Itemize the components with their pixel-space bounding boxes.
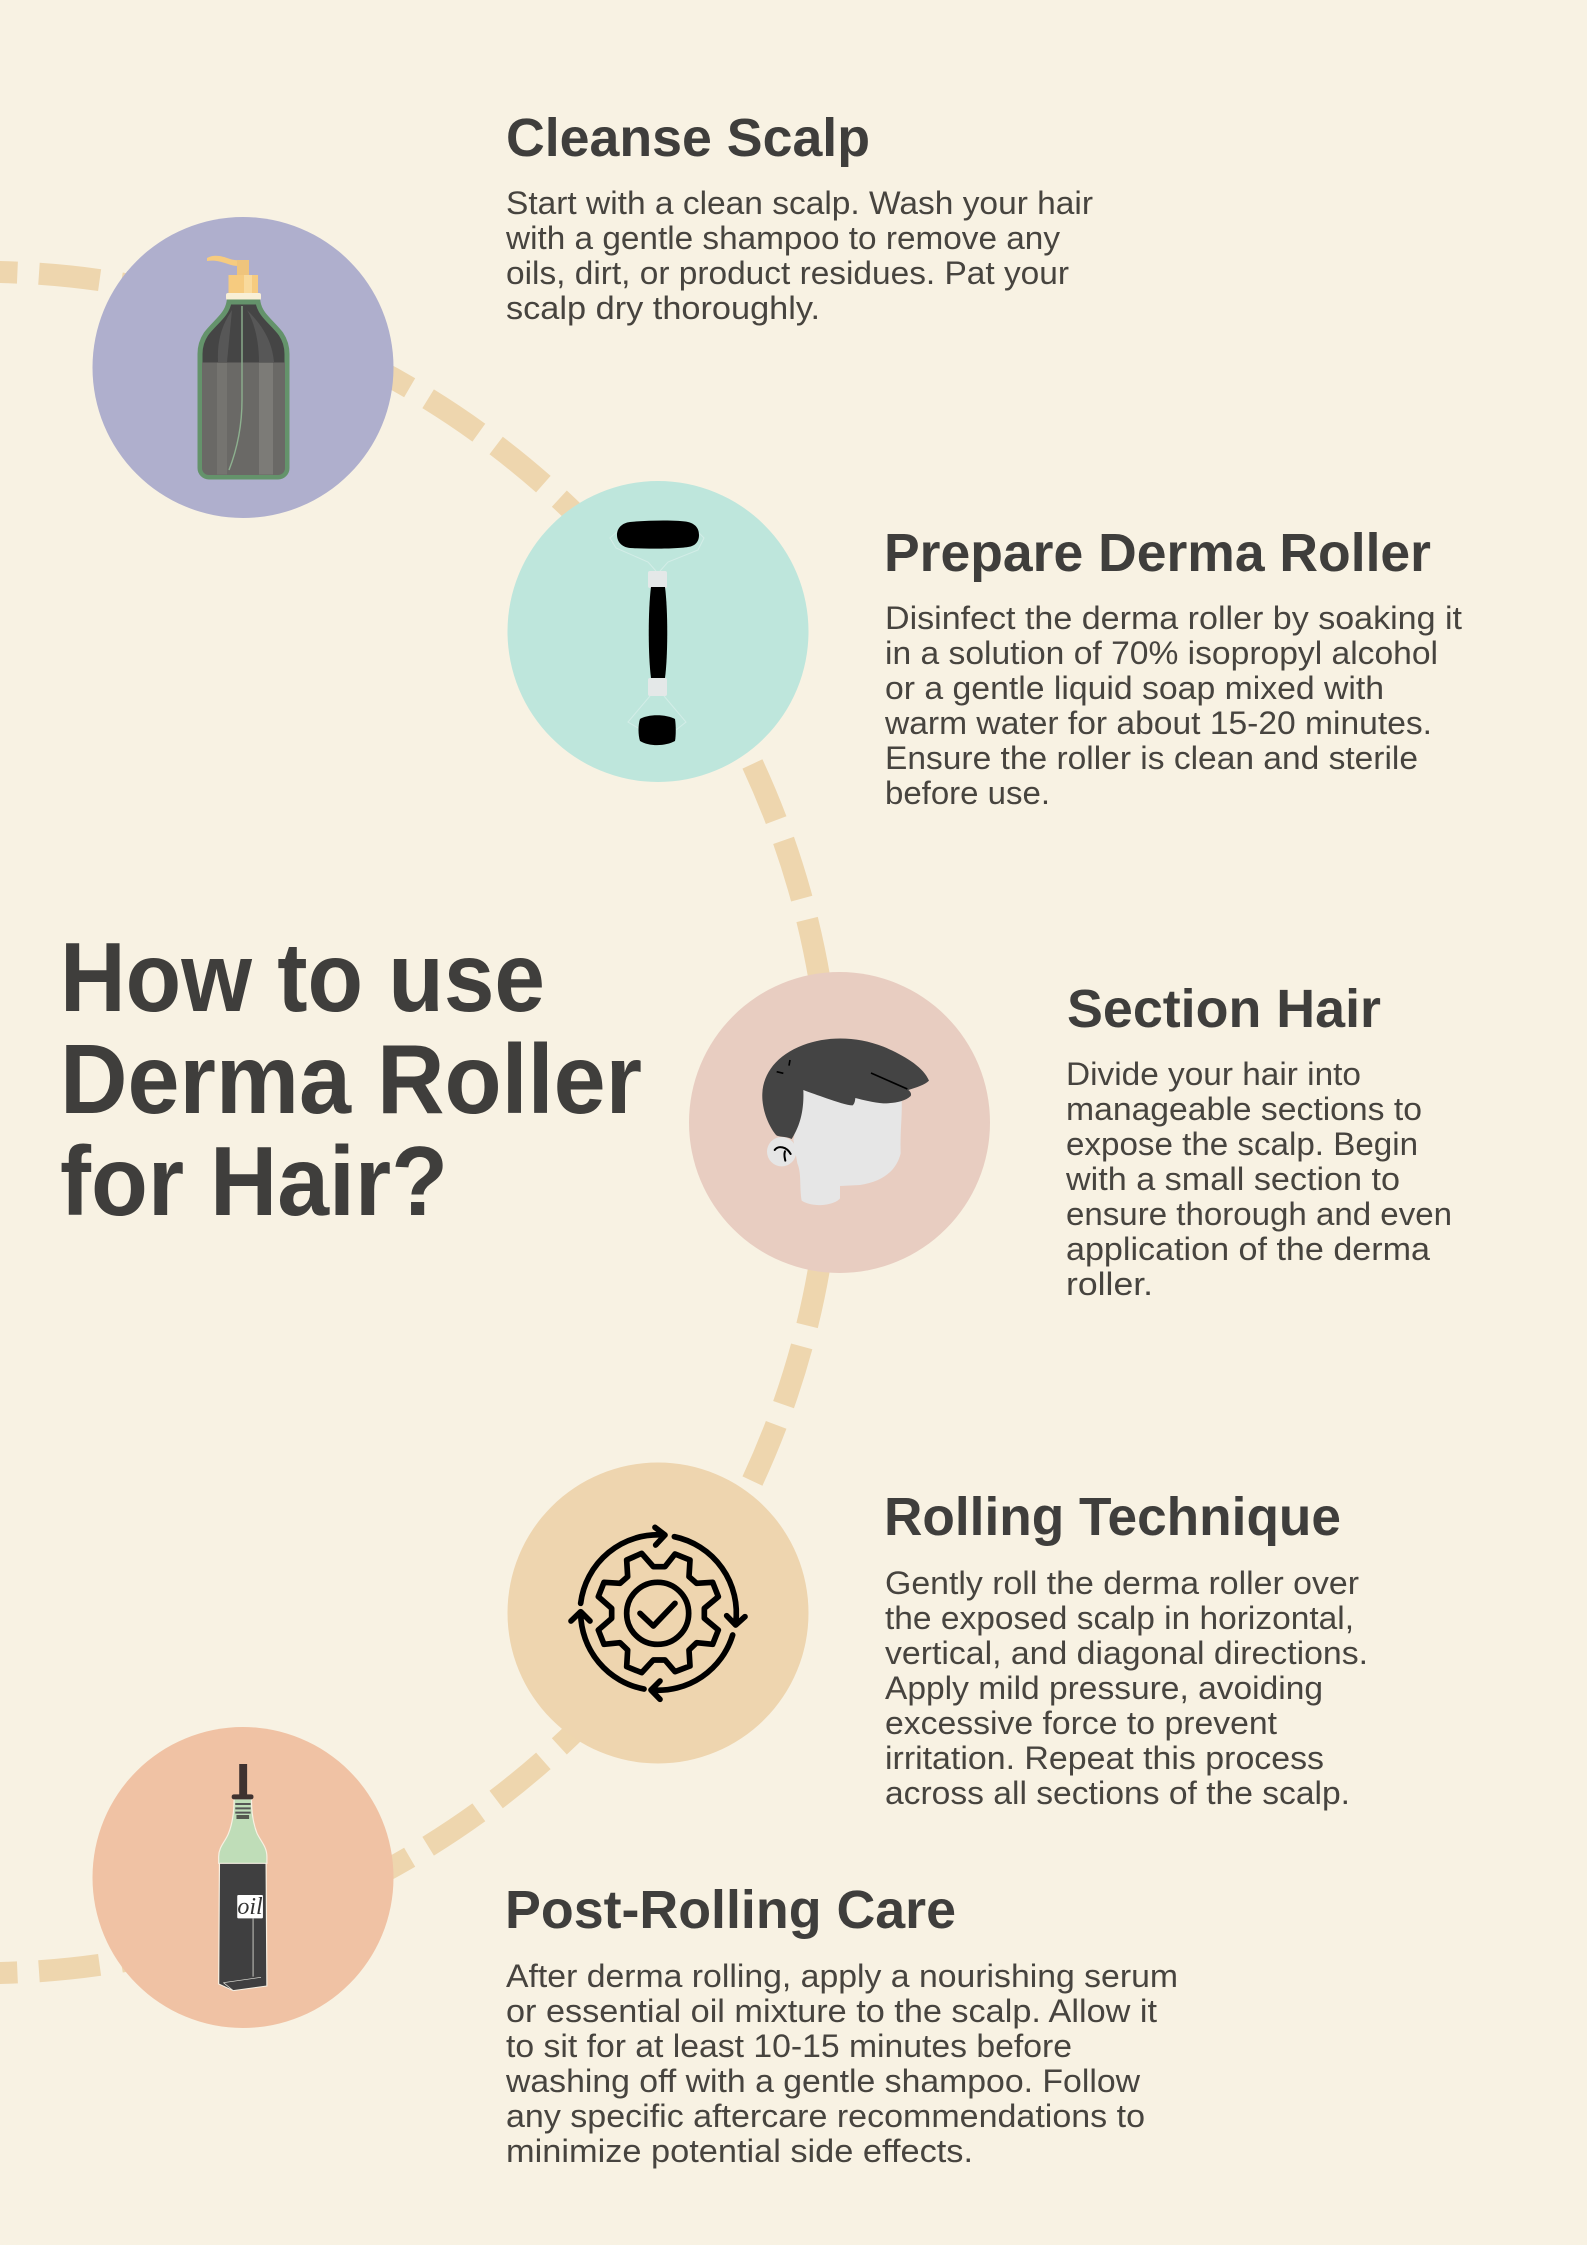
panel: rolling technique [508,1462,1368,1811]
description [1065,1056,1452,1302]
icon: oil bottle [92,1727,394,2028]
description: with a gentle shampoo to remove any [505,220,1060,256]
description: application of the derma [1066,1231,1430,1267]
description: warm water for about 15-20 minutes. [884,705,1432,741]
description: or a gentle liquid soap mixed with [885,670,1384,706]
panel: prepare derma roller [508,481,1462,811]
heading: Post-Rolling Care [505,1880,956,1940]
description: Apply mild pressure, avoiding [885,1670,1323,1706]
description: Divide your hair into [1066,1056,1361,1092]
description: or essential oil mixture to the scalp. Allow it [506,1993,1157,2029]
description [505,1958,1178,2169]
description: to sit for at least 10-15 minutes before [506,2028,1072,2064]
icon: head with hair [689,972,990,1273]
dashed curved path [0,272,832,1973]
description: Ensure the roller is clean and sterile [885,740,1418,776]
description: ensure thorough and even [1066,1196,1452,1232]
description: Disinfect the derma roller by soaking it [885,600,1462,636]
description: vertical, and diagonal directions. [885,1635,1368,1671]
description: in a solution of 70% isopropyl alcohol [885,635,1438,671]
description: washing off with a gentle shampoo. Follow [505,2063,1141,2099]
panel: section hair [689,972,1452,1302]
icon: gear with check and arrows [508,1462,808,1764]
title [60,922,642,1236]
description: expose the scalp. Begin [1066,1126,1418,1162]
bottle label: oil [237,1894,263,1920]
description: before use. [885,775,1050,811]
heading: Prepare Derma Roller [884,523,1431,583]
description: the exposed scalp in horizontal, [885,1600,1354,1636]
description: manageable sections to [1066,1091,1422,1127]
icon: shampoo pump bottle [92,217,394,518]
title: How to use [60,922,545,1032]
heading: Section Hair [1067,979,1381,1039]
description: Start with a clean scalp. Wash your hair [506,185,1093,221]
description [505,185,1093,326]
description: scalp dry thoroughly. [506,290,820,326]
title: Derma Roller [60,1024,642,1134]
description: with a small section to [1065,1161,1400,1197]
icon: derma roller [508,481,808,782]
description: After derma rolling, apply a nourishing serum [506,1958,1178,1994]
description: roller. [1066,1266,1153,1302]
panel: post-rolling care [92,1727,1178,2169]
title: for Hair? [60,1126,448,1236]
description: Gently roll the derma roller over [885,1565,1359,1601]
description: any specific aftercare recommendations to [506,2098,1145,2134]
heading: Cleanse Scalp [506,108,870,168]
description: minimize potential side effects. [506,2133,973,2169]
heading: Rolling Technique [884,1487,1341,1547]
panel: cleanse scalp [92,108,1093,518]
description: excessive force to prevent [885,1705,1277,1741]
description: irritation. Repeat this process [885,1740,1324,1776]
description [884,600,1462,811]
description: across all sections of the scalp. [885,1775,1350,1811]
description [885,1565,1368,1811]
description: oils, dirt, or product residues. Pat your [506,255,1069,291]
